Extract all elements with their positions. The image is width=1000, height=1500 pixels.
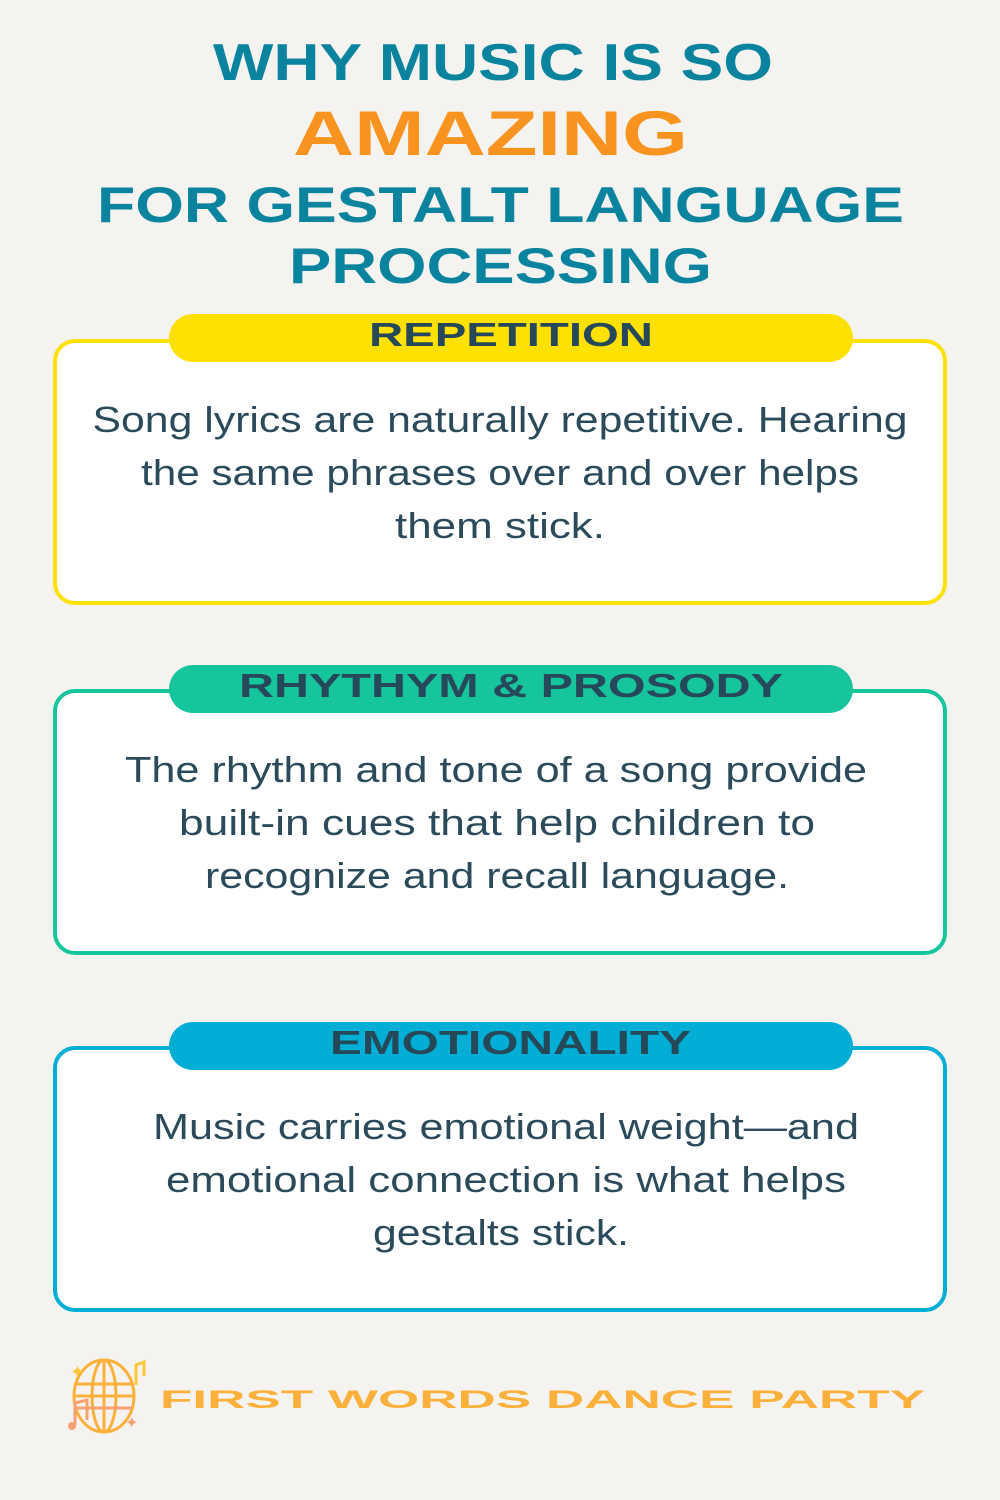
panel: rhythm xyxy=(55,665,945,953)
text: rhythm xyxy=(125,749,867,896)
title xyxy=(97,34,904,294)
panel: repetition xyxy=(55,314,945,603)
title: FOR GESTALT LANGUAGE xyxy=(97,177,904,233)
pill: repetition: REPETITION xyxy=(369,316,653,353)
title: AMAZING xyxy=(293,99,688,169)
title: PROCESSING xyxy=(289,238,712,294)
text: emotionality: emotional connection is what helps xyxy=(166,1159,846,1200)
text: emotionality: Music carries emotional weight—and xyxy=(153,1106,859,1147)
text: repetition: the same phrases over and over helps xyxy=(141,452,859,493)
pill: rhythm: RHYTHYM & PROSODY xyxy=(239,667,783,704)
logo icon: disco ball xyxy=(68,1360,144,1432)
pill: rhythm xyxy=(169,665,853,713)
logo icon: disco ball: ✦ xyxy=(70,1362,85,1382)
text: emotionality: gestalts stick. xyxy=(373,1212,629,1253)
footer brand: FIRST WORDS DANCE PARTY xyxy=(160,1386,926,1414)
text: repetition: them stick. xyxy=(395,505,605,546)
text: repetition: Song lyrics are naturally repetitive. Hearing xyxy=(92,399,908,440)
text: repetition xyxy=(92,399,908,546)
text: rhythm: recognize and recall language. xyxy=(205,855,789,896)
pill: emotionality xyxy=(169,1022,853,1070)
text: rhythm: built-in cues that help children to xyxy=(179,802,815,843)
logo icon: disco ball: ✦ xyxy=(125,1415,138,1432)
title: WHY MUSIC IS SO xyxy=(213,34,773,92)
pill: repetition xyxy=(169,314,853,362)
text: rhythm: The rhythm and tone of a song provide xyxy=(125,749,867,790)
text: emotionality xyxy=(153,1106,859,1253)
pill: emotionality: EMOTIONALITY xyxy=(330,1024,691,1061)
panel: emotionality xyxy=(55,1022,945,1310)
